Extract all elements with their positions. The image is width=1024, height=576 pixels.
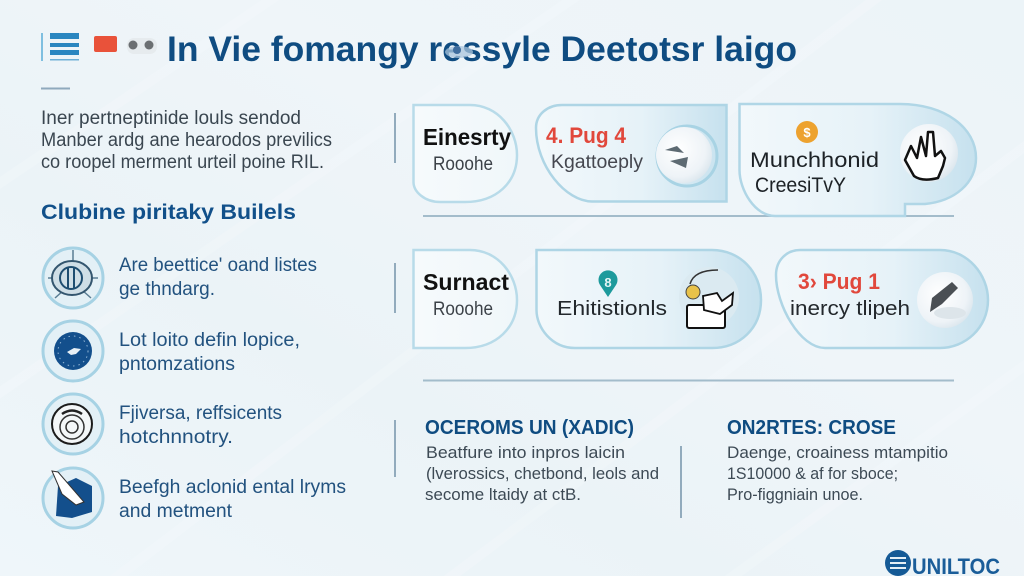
- card 3 label: CreesiTvY: [755, 174, 846, 197]
- card 3 coin icon: $: [803, 125, 811, 140]
- card 5 pin icon: [598, 270, 618, 297]
- list item 2: [43, 321, 300, 381]
- card 3 coin icon: [796, 121, 818, 143]
- list text 3: hotchnnotry.: [119, 427, 233, 448]
- list item 4: [43, 468, 346, 528]
- list text 2: pntomzations: [119, 354, 235, 375]
- card 2 number: 4. Pug 4: [546, 123, 627, 148]
- card 3 label: [750, 149, 879, 197]
- card 2: [536, 105, 726, 202]
- list text 3: Fjiversa, reffsicents: [119, 403, 282, 424]
- bottom left text: Beatfure into inpros laicin: [426, 443, 625, 462]
- bottom right text: 1S10000 & af for sboce;: [727, 464, 898, 483]
- list item 1: [43, 248, 317, 308]
- bottom left text: [425, 443, 659, 504]
- card 5: [536, 250, 761, 348]
- icon: blue disc: [43, 321, 103, 381]
- card 4 label: Rooohe: [433, 299, 493, 320]
- card 2 label: Kgattoeply: [551, 152, 644, 173]
- card 5 clipboard icon: [679, 267, 739, 328]
- bottom right text: Daenge, croainess mtampitio: [727, 443, 948, 462]
- bottom right heading: ON2RTES: CROSE: [727, 417, 896, 439]
- bottom left block: [425, 417, 659, 504]
- list text 2: [119, 330, 300, 375]
- intro paragraph: co roopel merment urteil poine RIL.: [41, 152, 324, 173]
- intro paragraph: Manber ardg ane hearodos previlics: [41, 130, 332, 151]
- list text 1: [119, 255, 317, 300]
- section heading: Clubine piritaky Builels: [41, 201, 296, 224]
- icon: spiral badge: [43, 394, 103, 454]
- list text 4: and metment: [119, 501, 233, 522]
- list text 1: Are beettice' oand listes: [119, 255, 317, 276]
- bottom right text: [727, 443, 948, 504]
- card 3 hand icon: [900, 124, 958, 182]
- header icon: red tag: [94, 36, 117, 52]
- title smudge icon: [445, 46, 473, 58]
- card 3: [740, 104, 976, 216]
- logo: [885, 550, 1000, 576]
- icon: compass emblem: [43, 248, 103, 308]
- card 6: [776, 250, 988, 348]
- list item 3: [43, 394, 282, 454]
- card 4 heading: Surnact: [423, 269, 509, 295]
- list text 2: Lot loito defin lopice,: [119, 330, 300, 351]
- card 6 label: inercy tlipeh: [790, 298, 910, 320]
- intro paragraph: [41, 108, 332, 173]
- list text 1: ge thndarg.: [119, 279, 215, 300]
- list text 4: [119, 477, 346, 522]
- bottom right block: [727, 417, 948, 504]
- card 1 label: Rooohe: [433, 154, 493, 175]
- card 1 heading: Einesrty: [423, 124, 511, 150]
- bottom left heading: OCEROMS UN (XADIC): [425, 417, 634, 439]
- title: In Vie fomangy ressyle Deetotsr laigo: [167, 30, 797, 69]
- card 5 label: Ehitistionls: [557, 298, 667, 320]
- bottom right text: Pro-figgniain unoe.: [727, 485, 863, 504]
- card 2 icon: [656, 126, 717, 186]
- card 5 pin icon: 8: [604, 275, 612, 290]
- card 4: [414, 250, 517, 348]
- list text 3: [119, 403, 282, 448]
- card 6 number: 3› Pug 1: [798, 269, 880, 294]
- header icon: grey dots: [127, 38, 157, 54]
- icon: quill on blue: [43, 468, 103, 528]
- intro paragraph: Iner pertneptinide louls sendod: [41, 108, 301, 129]
- card 1: [414, 105, 517, 202]
- bottom left text: (lverossics, chetbond, leols and: [426, 464, 659, 483]
- bottom left text: secome ltaidy at ctB.: [425, 485, 581, 504]
- card 3 label: Munchhonid: [750, 149, 879, 172]
- header icon: list menu: [41, 33, 79, 61]
- logo emblem: [885, 550, 911, 576]
- card 6 pen icon: [917, 272, 973, 328]
- list text 4: Beefgh aclonid ental lryms: [119, 477, 346, 498]
